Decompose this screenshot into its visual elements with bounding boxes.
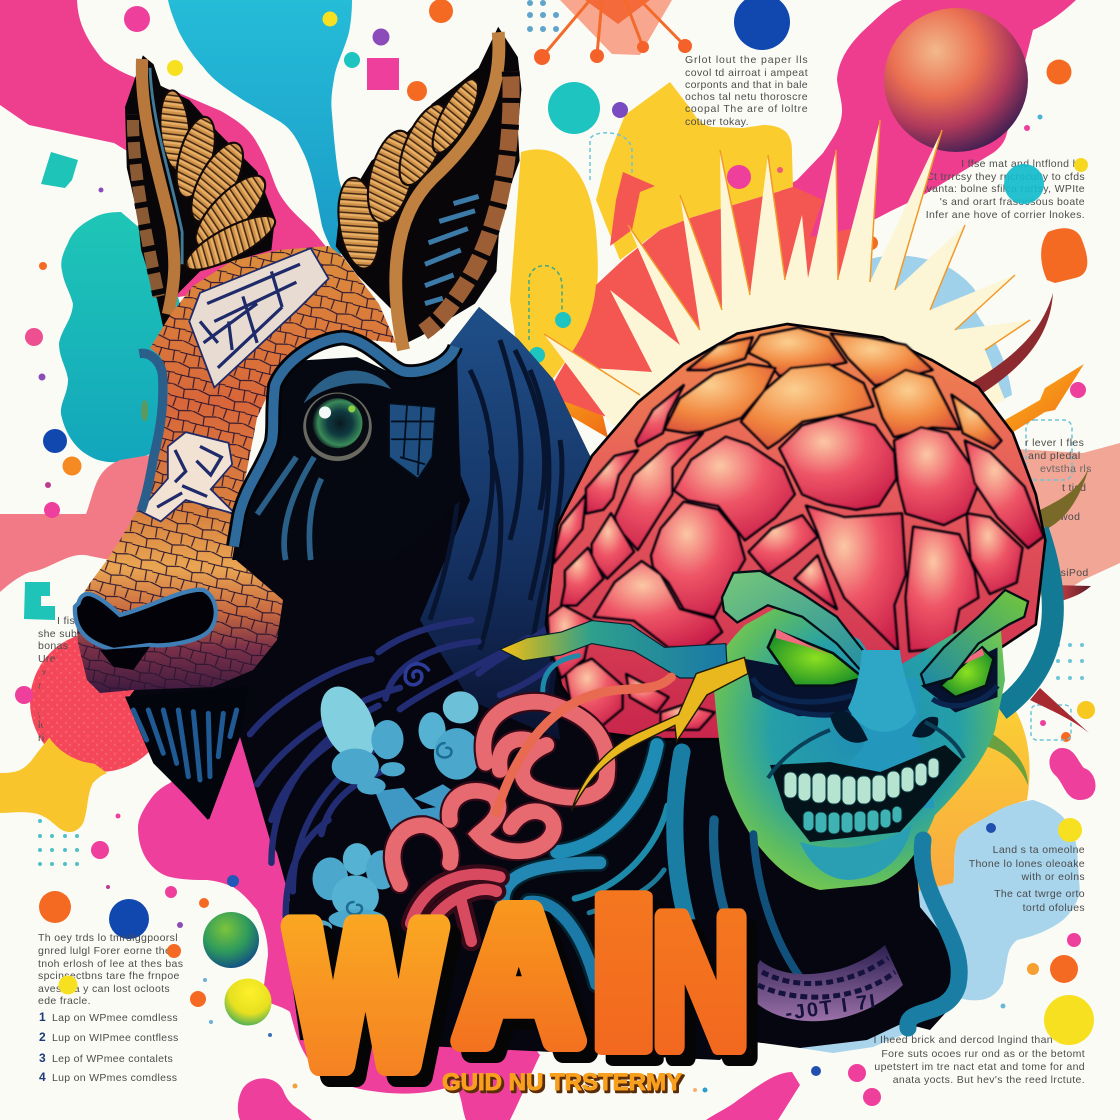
nose tip [848,650,916,732]
mouth [770,745,962,842]
numbered list: 4 [39,1070,46,1084]
numbered list: Lap on WPmee comdless [52,1012,178,1024]
text block: bottom left intro: gnred lulgl Forer eorne the [38,945,171,957]
text block: right mid: and pIedal [1028,450,1081,462]
text block: top [685,54,808,128]
nose [75,590,216,650]
side edge band [139,353,163,511]
lower teeth [803,806,902,834]
sphere: green [203,912,259,968]
title letters: W [290,884,441,1107]
left brow [722,571,883,678]
lower lip [800,824,912,880]
planet sphere [884,8,1028,152]
text block: left clipped: x [42,668,46,677]
nose bridge [829,678,934,808]
text block: upper right: tlvanta: bolne sfilca rartsy, WPIte [921,183,1085,195]
text block: lower right: with or eolns [1020,871,1085,883]
text block: left clipped: ri [38,732,45,744]
radiating burst behind brain [544,120,1030,480]
purple necklace: -J0T I 7I [784,990,879,1025]
text block: top: corponts and that in bale [685,79,808,91]
brain silhouette [546,324,1045,739]
text block: left clipped: loe [38,719,53,731]
subtitle: GUID NU TRSTERMY [444,1071,684,1098]
brain [546,324,1045,739]
title shadow: A [467,882,593,1093]
red dotted circle over left text [38,640,162,764]
text block: top: ochos tal netu thoroscre [685,91,808,103]
title shadow: I [594,860,675,1108]
numbered list: 3 [39,1051,46,1065]
scale panel [389,404,436,479]
iris [312,398,362,448]
text block: bottom right: I Iheed brick and dercod lngind than [873,1034,1053,1046]
title shadow: N [663,888,760,1097]
eye highlight [319,406,331,419]
title letters: I [583,849,664,1097]
numbered list: Lup on WIPmee contfless [52,1032,179,1044]
text block: right mid: wod [1059,511,1080,523]
blue brow band [234,337,455,546]
text block: bottom left intro: Th oey trds lo tmrdiggpoorsl [38,932,178,944]
dark mask [232,357,461,560]
text block: top: cotuer tokay. [685,116,749,128]
text block: right mid [1025,437,1092,579]
title shadow [301,860,760,1118]
blue flowers [304,678,480,981]
text block: left clipped: Ures [38,653,62,665]
text block: bottom right: upetstert im tre nact etat and tome for and [874,1061,1085,1073]
text block: left clipped: al [38,680,47,692]
text block: bottom right: Fore suts ocoes rur ond as or the betomt [881,1048,1085,1060]
cheek lines [753,678,998,715]
left tendril [500,621,728,678]
text block: left clipped [38,615,81,744]
eye sockets [745,647,998,716]
text block: bottom left intro [38,932,183,1007]
flower spirals [347,743,452,915]
text block: bottom left intro: avest ca y can lost ocloots [38,983,170,995]
title letters [290,849,749,1107]
right hair behind brain [1000,530,1053,710]
text block: lower right: The cat twrge orto [994,888,1085,900]
purple necklace [745,945,903,1025]
text block: lower right: tortd ofolues [1023,902,1085,914]
text block: upper right: Infer ane hove of corrier lnokes. [926,209,1085,221]
fur: navy strands and spiral [250,620,582,916]
text block: upper right: I ffse mat and lntflond ho [961,158,1085,170]
nostrils [830,710,938,743]
fur under snout and beard [75,590,248,819]
donkey head with scale texture [75,246,396,693]
title shadow: W [301,895,452,1118]
text block: right mid: t tisd [1062,482,1086,494]
text block: lower right: Land s ta omeolne [993,844,1085,856]
text block: left clipped: gl [38,707,47,719]
text block: upper right: Ct trrrcsy they rncrsculty to cfds [926,171,1085,183]
numbered list [39,1010,179,1084]
nostril gap [100,647,150,670]
text block: top: coopal The are of loltre [685,103,808,115]
text block: top: covol td airroat i ampeat [685,67,808,79]
accents over left text [58,944,181,994]
accent circles over upper right text [1004,158,1088,204]
teal hair tubes [503,656,800,984]
pink intestines [393,702,607,941]
text block: top: Grlot lout the paper lls [685,54,808,66]
title letters: A [456,871,582,1082]
beard stripes [133,710,237,780]
numbered list: 2 [39,1030,46,1044]
fur: blue neck feathers [420,307,592,740]
dark body silhouette [127,307,965,1060]
forehead tribal pattern [189,248,329,387]
face base [714,600,1005,890]
text block: left clipped: bonas [38,640,68,652]
top sunburst with pins [527,0,692,65]
text block: bottom right: anata yocts. But hev's the reed lrctute. [893,1074,1085,1086]
eye ring [303,392,372,461]
face details above [500,571,1028,808]
text block: right mid: evtstha rls [1040,463,1092,475]
golden claw [571,657,748,811]
text block: upper right: 's and orart frasocsous boate [940,196,1085,208]
text block: upper right [921,158,1085,221]
eye socket [306,394,369,456]
right brow [921,590,1028,686]
tendrils, flowers, intestines [304,656,800,984]
title WAIN [290,849,760,1118]
text block: left clipped: I fise [57,615,81,627]
donkey ears [125,27,521,350]
text block: bottom left intro: spcinsectbns tare fhe frnpoe [38,970,180,982]
left eye [768,630,864,686]
beak stripe [257,457,321,560]
brain lobes [548,328,1043,730]
left ear [125,55,282,332]
text block: left clipped: c [38,693,44,705]
sphere: yellow [224,978,272,1026]
text block: lower right [969,844,1085,914]
green glint [348,405,355,412]
beard [125,687,248,819]
title letters: N [652,877,749,1086]
subtitle: GUID NU TRSTERMY [442,1069,682,1096]
right eye [940,647,994,697]
smile folds [768,722,964,778]
text block: right mid: r lever I fles [1025,437,1084,449]
spikes from the brain [500,293,1091,785]
tongue [496,677,671,813]
numbered list: Lup on WPmes comdless [52,1072,177,1084]
right ear [333,27,521,350]
green face [500,571,1028,890]
right eyelid [950,648,984,670]
text block: bottom right [873,1034,1085,1086]
numbered list: 1 [39,1010,46,1024]
eyelid [304,371,391,404]
donkey eye and dark mask [139,337,461,560]
text block: right mid: csiPod [1055,567,1089,579]
upper teeth [784,758,939,805]
right hair loop [908,840,959,1028]
numbered list: Lep of WPmee contalets [52,1053,173,1065]
text block: lower right: Thone lo lones oleoake [969,858,1085,870]
far eye [141,400,148,421]
text block: bottom left intro: tnoh erlosh of lee at thes bas [38,958,183,970]
text block: left clipped: she sub [38,628,77,640]
text block: bottom left intro: ede fracle. [38,995,91,1007]
snout tribal pattern [139,432,236,521]
left eyelid [776,629,829,655]
